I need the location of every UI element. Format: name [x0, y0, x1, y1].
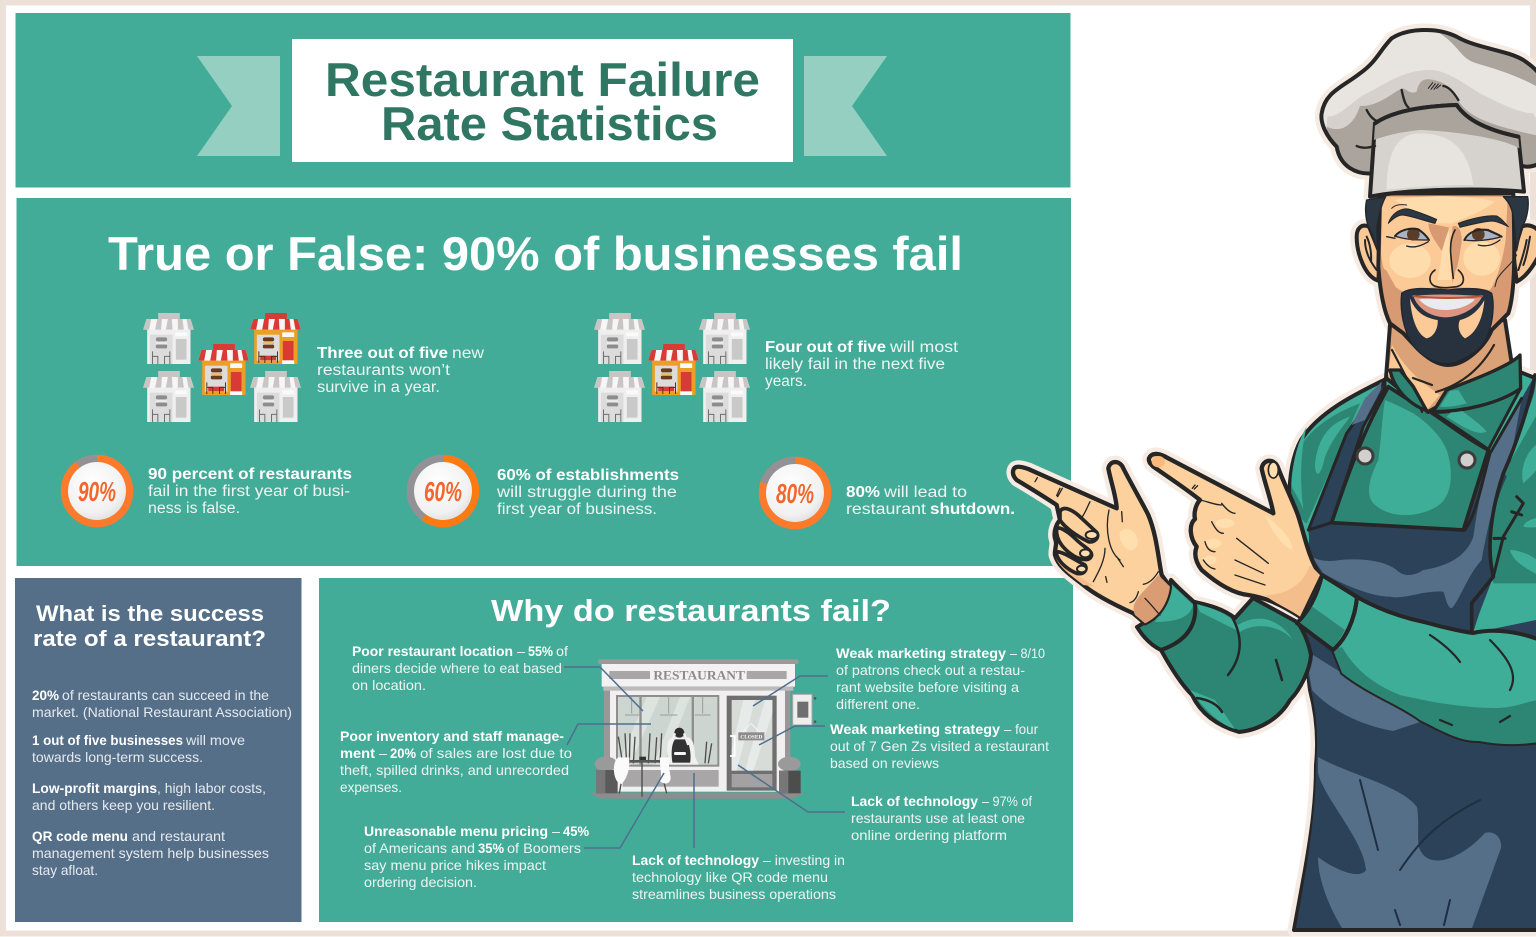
annotation: menu pricing: say menu price hikes impact — [364, 858, 546, 873]
heading: why do restaurants fail: Why do restaurants fail? — [491, 593, 891, 628]
panel: title banner — [16, 13, 1070, 188]
text: success rate facts: of restaurants can succeed in the — [62, 688, 269, 703]
text: success rate facts: 20% — [32, 688, 59, 703]
text: success rate facts: will move — [185, 733, 245, 748]
annotation: menu pricing: ordering decision. — [364, 875, 477, 890]
annotation: menu pricing: Unreasonable menu pricing — [364, 824, 548, 839]
heading: success rate: What is the success — [36, 601, 264, 626]
annotation: poor location: 55% — [528, 644, 553, 659]
chef halo outline — [1013, 30, 1536, 930]
text: 90 percent: fail in the first year of busi- — [148, 483, 350, 500]
icon group: four of five stores — [594, 313, 750, 422]
gauge: 80 percent: 80% — [776, 478, 814, 509]
annotation: inventory and staff: ment — [340, 746, 375, 761]
text: success rate facts: Low-profit margins — [32, 781, 157, 796]
text: 60 percent: 60% of establishments — [497, 467, 679, 484]
text: success rate facts: stay afloat. — [32, 863, 98, 878]
chef head — [1357, 193, 1536, 365]
title — [325, 53, 760, 150]
annotation: lack of technology, ordering: online ordering platform — [851, 828, 1007, 843]
gauge: 90 percent — [64, 458, 130, 524]
text: success rate facts: , high labor costs, — [157, 781, 266, 796]
gauge: 80 percent — [762, 460, 828, 526]
chef right arm — [1297, 575, 1536, 744]
panel: why restaurants fail — [319, 578, 1073, 922]
chef hat — [1321, 30, 1536, 197]
annotation: poor location: diners decide where to eat based — [352, 661, 562, 676]
annotation: weak marketing, website: different one. — [836, 697, 920, 712]
text: 60 percent: will struggle during the — [496, 484, 677, 501]
heading: true or false: True or False: 90% of businesses fail — [108, 227, 963, 280]
annotation: inventory and staff: of sales are lost due to — [420, 746, 572, 761]
annotation: lack of technology, QR menu: Lack of technology — [632, 853, 759, 868]
text: four out of five — [765, 339, 959, 390]
illustration: closed restaurant — [589, 659, 816, 799]
annotation: poor location: Poor restaurant location — [352, 644, 513, 659]
annotation: lack of technology, ordering: restaurants use at least one — [851, 811, 1025, 826]
title: Rate Statistics — [381, 97, 718, 150]
text: 90 percent: 90 percent of restaurants — [148, 466, 352, 483]
annotation: weak marketing, website: rant website before visiting a — [836, 680, 1019, 695]
annotation: lack of technology, QR menu: technology like QR code menu — [632, 870, 828, 885]
icon: left ribbon tail — [197, 56, 280, 156]
panel: success rate — [15, 578, 302, 922]
annotation: lack of technology, ordering: Lack of technology — [851, 794, 978, 809]
heading: success rate: rate of a restaurant? — [33, 626, 266, 651]
annotation: menu pricing: – — [552, 824, 560, 839]
text: 80 percent: restaurant — [846, 501, 927, 518]
text: 80 percent: 80% — [846, 484, 880, 501]
annotation: weak marketing, website: – 8/10 — [1010, 646, 1045, 661]
chef left sleeve — [1137, 580, 1311, 732]
text: 80 percent — [846, 484, 1015, 518]
annotation: menu pricing: 35% — [478, 841, 504, 856]
annotation: lack of technology, QR menu: streamlines business operations — [632, 887, 836, 902]
chef pointing hand, left — [1013, 462, 1170, 623]
text: four out of five: likely fail in the next five — [765, 356, 945, 373]
annotation: weak marketing, website — [836, 646, 1045, 712]
text: 80 percent: will lead to — [883, 484, 967, 501]
text: success rate facts: 1 out of five businesses — [32, 733, 183, 748]
annotation: weak marketing, reviews: Weak marketing strategy — [830, 722, 1000, 737]
annotation: lack of technology, QR menu: – investing in — [763, 853, 845, 868]
annotation: lack of technology, QR menu — [632, 853, 845, 902]
text: three out of five: restaurants won’t — [317, 362, 451, 379]
title: Restaurant Failure — [325, 53, 760, 106]
text: success rate facts: and others keep you resilient. — [32, 798, 215, 813]
gauge: 60 percent: 60% — [424, 476, 462, 507]
annotation: inventory and staff: Poor inventory and staff manage- — [340, 729, 564, 744]
text: success rate facts — [32, 688, 292, 878]
annotation: inventory and staff: theft, spilled drinks, and unrecorded — [340, 763, 569, 778]
gauge: 60 percent — [410, 458, 476, 524]
text: four out of five: Four out of five — [765, 339, 886, 356]
annotation: inventory and staff: – — [379, 746, 387, 761]
text: four out of five: years. — [765, 373, 807, 390]
gauge: 90 percent: 90% — [78, 476, 116, 507]
annotation: poor location: – — [517, 644, 525, 659]
illustration: closed restaurant: RESTAURANT — [653, 668, 746, 682]
title card — [292, 39, 793, 162]
annotation: inventory and staff: 20% — [390, 746, 416, 761]
text: three out of five: new — [452, 345, 485, 362]
annotation: poor location — [352, 644, 568, 693]
text: 60 percent — [496, 467, 679, 518]
chef buttons — [1357, 448, 1475, 468]
annotation: menu pricing: 45% — [563, 824, 589, 839]
annotation: inventory and staff: expenses. — [340, 780, 402, 795]
text: success rate facts: market. (National Restaurant Association) — [32, 705, 292, 720]
annotation: menu pricing: of Boomers — [507, 841, 581, 856]
text: success rate facts: QR code menu — [32, 829, 128, 844]
annotation: weak marketing, reviews: based on reviews — [830, 756, 939, 771]
text: 90 percent — [148, 466, 352, 517]
annotation: poor location: on location. — [352, 678, 426, 693]
annotation: weak marketing, website: of patrons check out a restau- — [836, 663, 1025, 678]
leader lines — [564, 667, 845, 848]
annotation: inventory and staff — [340, 729, 572, 795]
illustration: closed restaurant: CLOSED — [740, 735, 762, 741]
annotation: menu pricing: of Americans and — [364, 841, 475, 856]
chef jacket and apron — [1289, 372, 1536, 930]
annotation: weak marketing, reviews — [830, 722, 1049, 771]
text: four out of five: will most — [889, 339, 959, 356]
icon: right ribbon tail — [804, 56, 887, 156]
text: 80 percent: shutdown. — [930, 501, 1015, 518]
text: three out of five — [317, 345, 485, 396]
icon group: three of five stores — [143, 313, 301, 422]
annotation: menu pricing — [364, 824, 589, 890]
chef pointing hand, right — [1149, 454, 1320, 617]
text: three out of five: Three out of five — [317, 345, 448, 362]
annotation: weak marketing, reviews: out of 7 Gen Zs visited a restaurant — [830, 739, 1049, 754]
chef neck and collar — [1386, 320, 1521, 412]
text: success rate facts: towards long-term success. — [32, 750, 203, 765]
annotation: weak marketing, website: Weak marketing strategy — [836, 646, 1006, 661]
text: 90 percent: ness is false. — [148, 500, 240, 517]
heading: success rate — [33, 601, 266, 651]
text: success rate facts: and restaurant — [132, 829, 225, 844]
annotation: weak marketing, reviews: – four — [1004, 722, 1038, 737]
annotation: lack of technology, ordering — [851, 794, 1032, 843]
text: 60 percent: first year of business. — [497, 501, 657, 518]
annotation: poor location: of — [556, 644, 568, 659]
text: success rate facts: management system help businesses — [32, 846, 269, 861]
illustration: chef pointing — [1013, 30, 1536, 930]
panel: true or false — [16, 198, 1071, 566]
text: three out of five: survive in a year. — [317, 379, 440, 396]
annotation: lack of technology, ordering: – 97% of — [982, 794, 1032, 809]
